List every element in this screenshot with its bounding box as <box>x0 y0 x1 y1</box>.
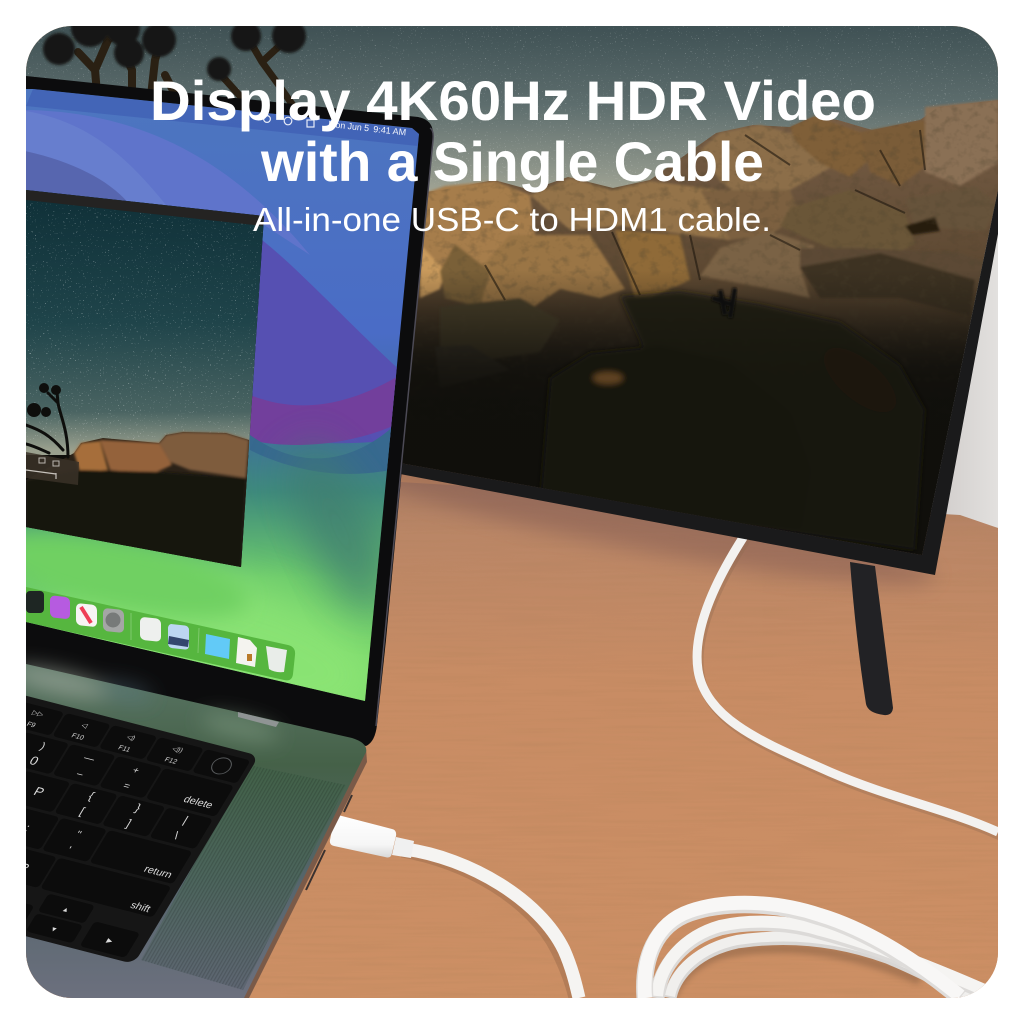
monitor bezel <box>400 190 998 575</box>
key legends: — <box>81 753 97 765</box>
rock shadow falloff <box>400 270 1000 565</box>
key legends: F9 <box>25 721 37 729</box>
news glyph <box>81 607 91 623</box>
preview <box>168 624 189 650</box>
key legends: [ <box>77 805 88 818</box>
key legends: + <box>130 766 141 776</box>
news <box>76 603 97 627</box>
key legends: " <box>73 829 83 841</box>
key legends: ◁)) <box>171 746 184 754</box>
speaker grille <box>141 765 346 990</box>
key legends: ◁ <box>80 722 89 730</box>
video window <box>20 190 270 570</box>
lid bezel <box>26 76 433 746</box>
key legends: ' <box>65 845 73 856</box>
key legends: – <box>74 769 86 780</box>
shrub <box>712 288 735 318</box>
key legends: F11 <box>117 745 132 754</box>
key legends: ◁) <box>125 734 136 742</box>
keys <box>0 687 251 959</box>
coiled cable on desk <box>645 903 998 1003</box>
key legends: ? <box>18 861 32 875</box>
key legends: F10 <box>70 733 85 742</box>
apple tv <box>26 591 44 613</box>
wallpaper screen <box>26 89 419 701</box>
key legends: { <box>86 789 97 802</box>
key legends: delete <box>181 794 215 811</box>
deck side edge <box>240 748 367 998</box>
laptop <box>0 76 433 998</box>
wallpaper swooshes <box>0 110 409 756</box>
headline <box>150 69 876 238</box>
key legends: ▼ <box>48 926 59 934</box>
settings wheel <box>106 612 120 628</box>
key legends <box>0 710 239 952</box>
player icons <box>39 458 59 466</box>
keyboard deck <box>26 664 366 998</box>
key legends: } <box>133 801 144 814</box>
dock icons <box>26 591 287 672</box>
document thumbnail <box>247 654 252 661</box>
headline line 2: with a Single Cable <box>260 130 764 193</box>
key legends: = <box>121 781 132 792</box>
rock formation <box>400 100 998 600</box>
key legends: 0 <box>27 753 42 768</box>
rock cracks <box>485 130 925 300</box>
ports <box>306 795 352 890</box>
monitor screen: desert night photo <box>26 9 1000 600</box>
dock dividers <box>131 613 199 653</box>
subheading: All-in-one USB-C to HDM1 cable. <box>253 201 771 238</box>
keyboard well <box>0 680 259 964</box>
headline line 1: Display 4K60Hz HDR Video <box>150 69 876 132</box>
key legends: ▷▷ <box>31 710 45 719</box>
key legends: ▶ <box>105 938 114 945</box>
cable to monitor <box>697 530 1000 836</box>
trash <box>266 646 287 672</box>
key legends: ▲ <box>60 906 70 914</box>
document <box>236 637 257 667</box>
USB-C cable <box>330 815 579 998</box>
menu bar icons <box>264 116 314 127</box>
night sky <box>26 26 998 226</box>
window tree crowns <box>27 383 61 417</box>
menu bar <box>26 89 419 146</box>
key legends: : <box>22 821 33 834</box>
key legends: \ <box>171 829 182 842</box>
freeform <box>140 617 161 642</box>
rock texture <box>420 102 998 303</box>
settings <box>103 608 124 633</box>
wooden desk <box>26 433 998 998</box>
window tree <box>26 392 68 457</box>
menu bar date: Mon Jun 5 <box>328 119 370 133</box>
deck reflections <box>9 661 281 747</box>
key legends: | <box>181 814 191 826</box>
player controls <box>26 452 79 485</box>
wall behind monitor <box>930 200 998 528</box>
connector <box>392 837 414 858</box>
key legends: ) <box>38 741 48 752</box>
player progress <box>26 470 56 479</box>
key legends: shift <box>128 900 153 915</box>
touch id ring <box>208 756 235 776</box>
key legends: ] <box>124 817 134 830</box>
keyboard <box>0 680 259 964</box>
joshua trees <box>42 26 308 104</box>
lid rim highlight <box>376 128 433 726</box>
stars <box>26 26 998 186</box>
preview landscape <box>168 636 189 647</box>
dock <box>26 587 295 680</box>
podcasts <box>50 595 70 619</box>
monitor stand <box>850 562 893 715</box>
title bar <box>26 190 264 226</box>
key legends: F12 <box>163 757 178 766</box>
window sky <box>20 190 270 455</box>
hinge <box>238 712 279 727</box>
dark domes <box>540 291 925 550</box>
boulders <box>418 99 998 358</box>
menu bar time: 9:41 AM <box>373 124 407 137</box>
key legends: return <box>142 864 174 881</box>
key legends: P <box>31 784 47 799</box>
folder <box>205 634 230 659</box>
window rocks <box>26 432 250 570</box>
